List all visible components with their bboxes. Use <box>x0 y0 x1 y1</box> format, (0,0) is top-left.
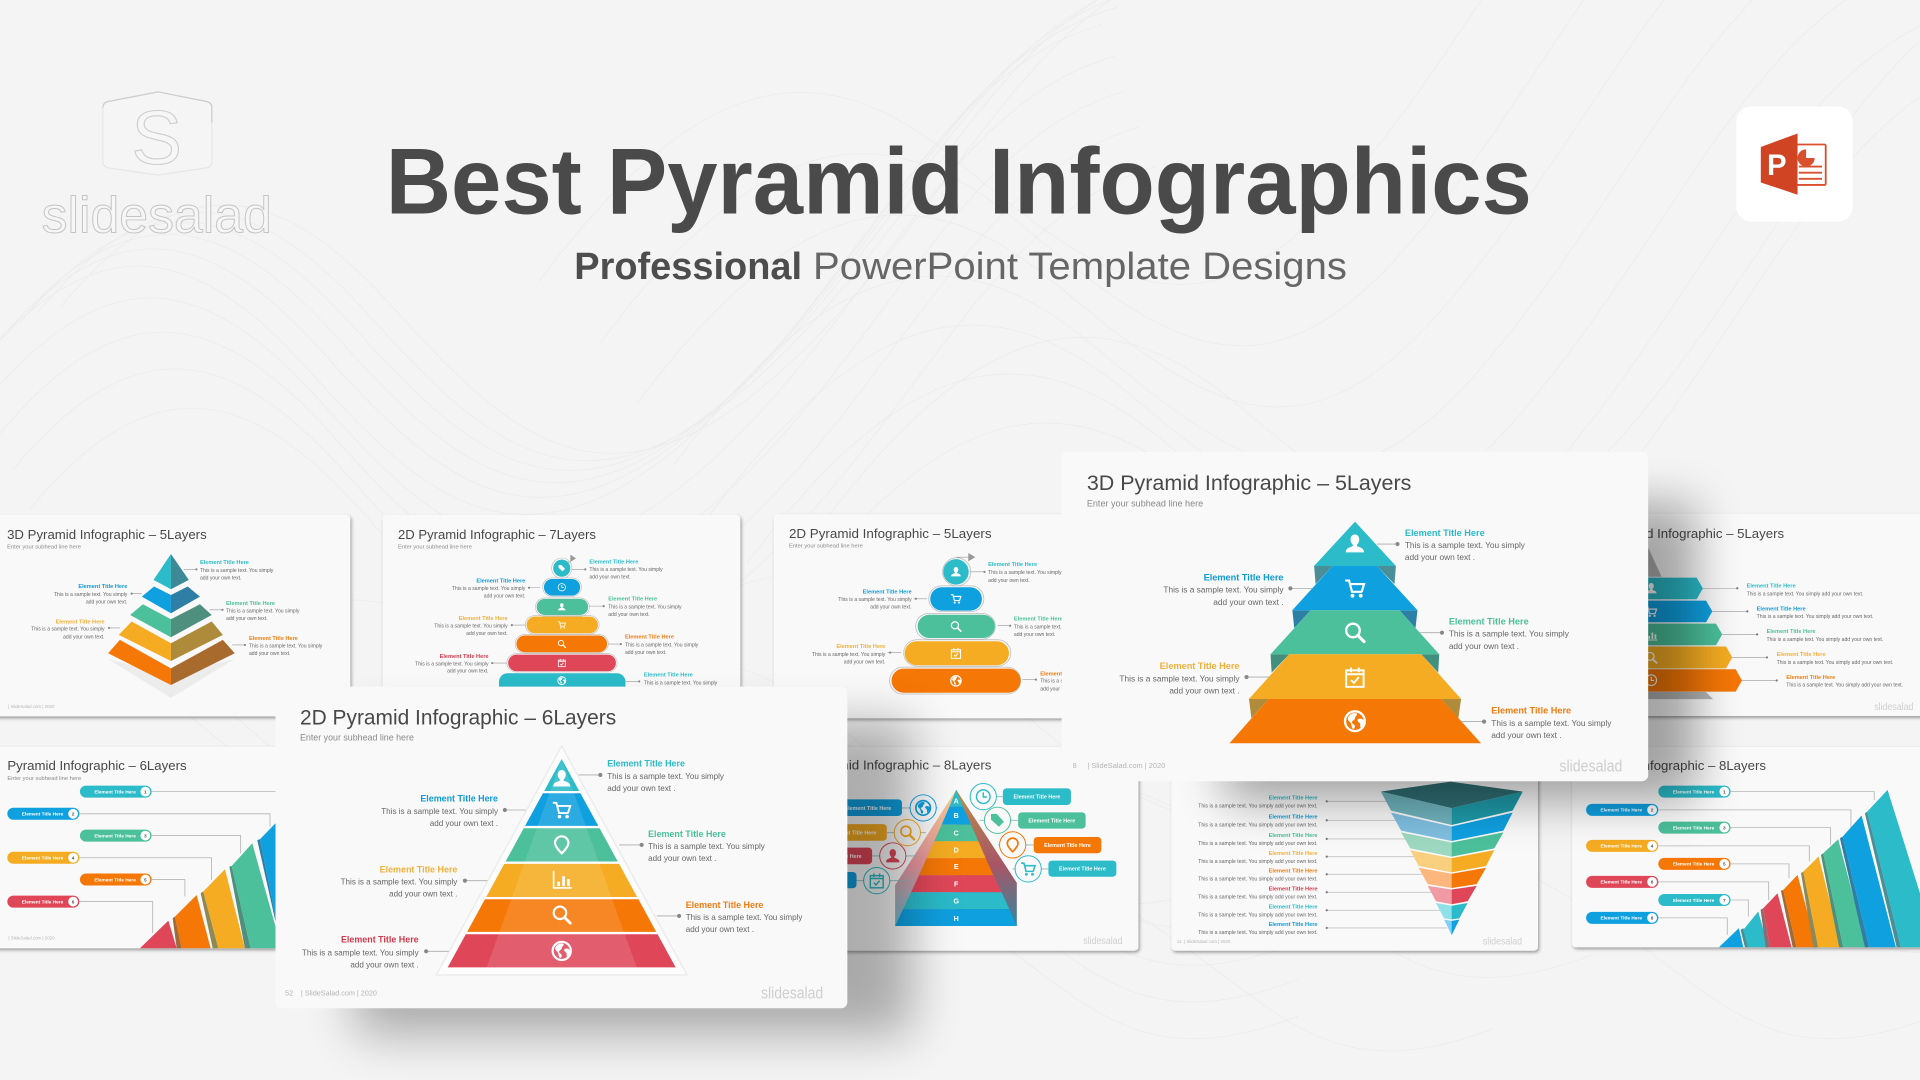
labels: add your own text. <box>1014 632 1055 638</box>
pills: Element Title Here <box>22 899 64 905</box>
labels: add your own text. <box>447 669 489 675</box>
labels: Element Title Here <box>1040 671 1089 677</box>
panel: stair pyramid 8 layers (right) <box>1572 747 1920 947</box>
pills: Element Title Here <box>22 856 64 862</box>
slide subhead: Enter your subhead line here <box>398 544 472 550</box>
lettered pyramid: H <box>954 915 959 923</box>
pills: 5 <box>144 877 147 883</box>
labels: Element Title Here <box>78 584 127 590</box>
labels: add your own text. <box>625 650 666 656</box>
pills: Element Title Here <box>1673 898 1715 904</box>
labels: This is a sample text. You simply <box>625 643 699 649</box>
slide subhead: Enter your subhead line here <box>7 544 81 550</box>
labels: This is a sample text. You simply add your own text. <box>1198 930 1318 936</box>
logo: slidesalad embossed mark: slidesalad <box>42 186 272 244</box>
footer: 14 | SlideSalad.com | 2020 <box>1177 939 1231 944</box>
labels: This is a sample text. You simply add your own text. <box>1767 637 1883 643</box>
stepped 3D pyramid <box>1230 522 1481 743</box>
labels: Element Title Here <box>249 636 298 642</box>
pills: 5 <box>1723 862 1726 868</box>
footer: | SlideSalad.com | 2020 <box>8 704 55 709</box>
panel: arrow pyramid 5 layers (right) <box>1584 514 1920 716</box>
labels: Element Title Here <box>440 654 489 660</box>
labels: This is a sample text. You simply add your own text. <box>1198 859 1318 865</box>
labels: Element Title Here <box>1757 606 1806 612</box>
icon: PowerPoint: P <box>1767 149 1787 182</box>
labels: add your own text. <box>589 574 631 580</box>
labels: This is a sample text. You simply <box>607 772 725 781</box>
labels: This is a sample text. You simply <box>341 878 458 887</box>
pills: 3 <box>1723 825 1726 831</box>
stacked pill pyramid <box>890 553 1021 694</box>
pills <box>7 786 152 908</box>
labels: Element Title Here <box>420 794 498 804</box>
labels <box>302 758 803 969</box>
labels: add your own text. <box>249 651 290 657</box>
labels: This is a sample text. You simply <box>249 644 323 650</box>
lettered pyramid: B <box>954 812 959 820</box>
lettered pyramid: F <box>954 880 959 888</box>
panel: featured 2D pyramid 6 layers: | SlideSalad.com | 2020 <box>301 988 377 997</box>
lettered pyramid: D <box>954 846 959 854</box>
labels: add your own text . <box>1405 552 1475 562</box>
labels: This is a sample text. You simply <box>381 807 499 816</box>
labels: This is a sample text. You simply add your own text. <box>1757 614 1873 620</box>
labels: This is a sample text. You simply <box>302 948 420 957</box>
labels: This is a sample text. You simply <box>589 567 663 573</box>
leader lines <box>1327 801 1447 928</box>
labels: Element Title Here <box>1269 905 1318 911</box>
labels: This is a sample text. You simply add your own text. <box>1777 660 1893 666</box>
labels: add your own text . <box>1449 641 1519 651</box>
labels: This is a sample text. You simply <box>226 609 300 615</box>
labels: Element Title Here <box>1269 922 1318 928</box>
labels: Element Title Here <box>608 597 657 603</box>
labels: This is a sample text. You simply <box>200 568 274 574</box>
labels: This is a sample text. You simply <box>812 652 886 658</box>
labels: This is a sample text. You simply <box>1491 718 1612 728</box>
icon callouts: Element Title Here <box>845 806 891 812</box>
labels: add your own text . <box>1213 597 1284 607</box>
connector lines <box>1658 792 1874 935</box>
labels: add your own text . <box>1491 730 1562 740</box>
labels: This is a sample text. You simply <box>415 661 489 667</box>
panel: inverted pyramid 8 layers <box>1171 747 1538 951</box>
labels: This is a sample text. You simply add your own text. <box>1786 683 1903 689</box>
icon callouts: Element Title Here <box>1059 867 1106 873</box>
pills: 3 <box>144 833 147 839</box>
labels: This is a sample text. You simply <box>988 570 1062 576</box>
labels: This is a sample text. You simply <box>1449 629 1570 639</box>
labels: This is a sample text. You simply <box>434 623 508 629</box>
arrow layers <box>1641 545 1742 699</box>
labels: This is a sample text. You simply <box>608 604 682 610</box>
slide heading: 3D Pyramid Infographic – 8Layers <box>789 757 992 772</box>
slide subhead: Enter your subhead line here <box>300 731 414 742</box>
pills: 1 <box>144 789 147 795</box>
slide subhead: Enter your subhead line here <box>1087 498 1203 509</box>
labels: add your own text . <box>607 784 675 793</box>
slide heading: Pyramid Infographic – 8Layers <box>1587 758 1766 773</box>
labels: Element Title Here <box>1269 869 1318 875</box>
labels: add your own text. <box>200 575 241 581</box>
labels: Element Title Here <box>863 589 912 595</box>
labels: This is a sample text. You simply <box>1163 585 1284 595</box>
watermark: slidesalad <box>1483 937 1522 948</box>
labels: Element Title Here <box>988 562 1037 568</box>
pills: 1 <box>1723 789 1726 795</box>
labels: Element Title Here <box>1269 815 1318 821</box>
labels: Element Title Here <box>1014 616 1063 622</box>
labels: Element Title Here <box>1747 584 1796 590</box>
icon callouts <box>789 784 1116 894</box>
labels: add your own text . <box>648 854 716 863</box>
labels: Element Title Here <box>200 560 249 566</box>
labels: This is a sample text. You simply add your own text. <box>1198 841 1318 847</box>
labels: add your own text. <box>988 578 1030 584</box>
labels: add your own text. <box>86 599 127 605</box>
inverted 3D pyramid <box>1381 782 1523 935</box>
slide heading: Pyramid Infographic – 6Layers <box>7 758 187 773</box>
pills: Element Title Here <box>1673 789 1715 795</box>
labels: This is a sample text. You simply add your own text. <box>1198 803 1318 809</box>
labels: This is a sample text. You simply <box>1040 679 1114 685</box>
pills: 6 <box>72 899 75 905</box>
labels: Element Title Here <box>1160 661 1240 671</box>
panel: stair pyramid 6 layers (left) <box>0 747 287 948</box>
labels: This is a sample text. You simply add your own text. <box>1198 912 1318 918</box>
labels: This is a sample text. You simply add your own text. <box>1747 591 1863 597</box>
labels <box>1119 528 1612 740</box>
connector lines <box>79 792 276 933</box>
slide heading: 2D Pyramid Infographic – 7Layers <box>398 527 596 542</box>
title: Best Pyramid Infographics <box>386 129 1532 234</box>
labels: add your own text . <box>1169 686 1240 696</box>
labels: add your own text. <box>484 593 525 599</box>
lettered pyramid: C <box>954 829 959 837</box>
slide heading: 2D Pyramid Infographic – 6Layers <box>300 707 616 730</box>
pills: Element Title Here <box>1673 825 1715 831</box>
labels: add your own text. <box>63 634 105 640</box>
logo: slidesalad embossed mark <box>42 92 272 244</box>
slide heading: 2D Pyramid Infographic – 5Layers <box>1584 526 1784 541</box>
icon callouts: Element Title Here <box>830 830 876 836</box>
panel: featured 3D pyramid 5 layers <box>1062 452 1648 781</box>
labels: Element Title Here <box>1269 833 1318 839</box>
labels: Element Title Here <box>1777 652 1826 658</box>
labels: Element Title Here <box>1405 528 1485 538</box>
flat pyramid <box>436 746 687 975</box>
labels: Element Title Here <box>476 578 525 584</box>
labels: Element Title Here <box>625 635 674 641</box>
pills: Element Title Here <box>1600 844 1642 850</box>
labels: This is a sample text. You simply <box>686 913 803 922</box>
logo: slidesalad embossed mark: S <box>131 96 182 181</box>
slide subhead: Enter your subhead line here <box>789 543 863 549</box>
labels: Element Title Here <box>56 619 105 625</box>
pills: Element Title Here <box>22 812 64 818</box>
labels <box>812 562 1114 693</box>
slide heading: 3D Pyramid Infographic – 5Layers <box>7 527 207 542</box>
labels: Element Title Here <box>648 829 726 839</box>
pills: 7 <box>1723 898 1726 904</box>
labels: Element Title Here <box>459 616 508 622</box>
labels: add your own text. <box>608 612 650 618</box>
lettered pyramid <box>895 790 1017 926</box>
labels: Element Title Here <box>1786 675 1835 681</box>
labels: This is a sample text. You simply add your own text. <box>1198 822 1318 828</box>
labels: Element Title Here <box>1269 851 1318 857</box>
labels: Element Title Here <box>686 900 763 910</box>
watermark: slidesalad <box>1559 756 1622 775</box>
labels <box>1198 796 1318 936</box>
labels: Element Title Here <box>1491 706 1571 716</box>
labels: This is a sample text. You simply add your own text. <box>1198 894 1318 900</box>
labels: Element Title Here <box>226 601 275 607</box>
labels: This is a sample text. You simply <box>838 597 912 603</box>
subtitle: Professional <box>574 246 802 288</box>
labels: Element Title Here <box>341 935 419 945</box>
labels: add your own text . <box>430 819 498 828</box>
labels: add your own text. <box>466 631 508 637</box>
labels: This is a sample text. You simply <box>1119 673 1240 683</box>
labels: Element Title Here <box>1269 887 1318 893</box>
labels: Element Title Here <box>644 673 693 679</box>
labels: Element Title Here <box>836 644 885 650</box>
labels: This is a sample text. You simply add your own text. <box>1198 876 1318 882</box>
watermark: slidesalad <box>761 984 823 1003</box>
slide heading: 2D Pyramid Infographic – 5Layers <box>789 526 992 541</box>
labels: This is a sample text. You simply <box>452 586 526 592</box>
labels: This is a sample text. You simply <box>644 680 718 686</box>
footer: | SlideSalad.com | 2020 <box>8 936 55 941</box>
icon callouts: Element Title Here <box>1028 818 1075 824</box>
pills: Element Title Here <box>1600 808 1642 814</box>
pills: 8 <box>1651 916 1654 922</box>
footer: 52 <box>285 988 293 997</box>
panel: 3D pyramid 8 layers <box>789 747 1138 951</box>
panel: featured 3D pyramid 5 layers: | SlideSalad.com | 2020 <box>1087 761 1165 770</box>
labels <box>1747 584 1903 689</box>
stairs <box>1719 790 1920 947</box>
lettered pyramid: E <box>954 863 959 871</box>
labels: Element Title Here <box>1269 796 1318 802</box>
lettered pyramid: A <box>954 797 959 805</box>
icon callouts: Element Title Here <box>1013 795 1060 801</box>
watermark: slidesalad <box>1874 702 1913 713</box>
pills: Element Title Here <box>94 789 136 795</box>
labels: add your own text. <box>1040 687 1082 693</box>
slide heading: 3D Pyramid Infographic – 5Layers <box>1087 471 1411 495</box>
pills: 2 <box>1651 808 1654 814</box>
icon: PowerPoint <box>1736 107 1853 222</box>
icon callouts: Element Title Here <box>815 854 862 860</box>
labels: This is a sample text. You simply <box>1014 624 1088 630</box>
pills: Element Title Here <box>1600 880 1642 886</box>
pills: 6 <box>1651 880 1654 886</box>
labels: Element Title Here <box>1204 572 1284 582</box>
labels: add your own text. <box>226 616 268 622</box>
labels: Element Title Here <box>1767 629 1816 635</box>
pills: Element Title Here <box>94 877 136 883</box>
pills: Element Title Here <box>1673 862 1715 868</box>
labels: add your own text . <box>686 925 754 934</box>
panel: featured 2D pyramid 6 layers <box>276 687 847 1008</box>
watermark: slidesalad <box>1083 936 1122 947</box>
pills: 4 <box>1651 844 1654 850</box>
lettered pyramid: G <box>953 897 959 905</box>
labels: This is a sample text. You simply <box>1405 540 1526 550</box>
pills: Element Title Here <box>1600 916 1642 922</box>
labels: add your own text. <box>870 605 912 611</box>
pills <box>1586 786 1731 924</box>
subtitle <box>574 246 1347 288</box>
slide subhead: Enter your subhead line here <box>7 776 81 782</box>
labels: This is a sample text. You simply <box>31 627 105 633</box>
icon callouts: Element Title Here <box>1044 843 1091 849</box>
stacked pill pyramid <box>499 555 625 698</box>
labels: Element Title Here <box>1449 616 1529 626</box>
pills: 4 <box>72 856 75 862</box>
pills: Element Title Here <box>94 833 136 839</box>
labels: This is a sample text. You simply <box>54 592 128 598</box>
labels: Element Title Here <box>589 559 638 565</box>
labels: add your own text . <box>350 960 419 969</box>
panel: 3D pyramid 5 layers (left) <box>0 515 350 716</box>
labels <box>415 559 718 686</box>
labels: add your own text. <box>844 660 885 666</box>
panel: 2D pyramid 5 layers <box>774 514 1129 718</box>
panel: 2D pyramid 7 layers <box>383 515 740 717</box>
labels: Element Title Here <box>607 758 685 768</box>
labels: This is a sample text. You simply <box>648 842 766 851</box>
footer: 8 <box>1073 761 1077 770</box>
labels <box>31 560 323 657</box>
labels: Element Title Here <box>380 865 457 875</box>
pills: 2 <box>72 812 75 818</box>
subtitle: PowerPoint Template Designs <box>813 246 1347 288</box>
stairs <box>140 823 276 948</box>
3D layered pyramid <box>108 554 235 698</box>
labels: add your own text . <box>389 890 457 899</box>
